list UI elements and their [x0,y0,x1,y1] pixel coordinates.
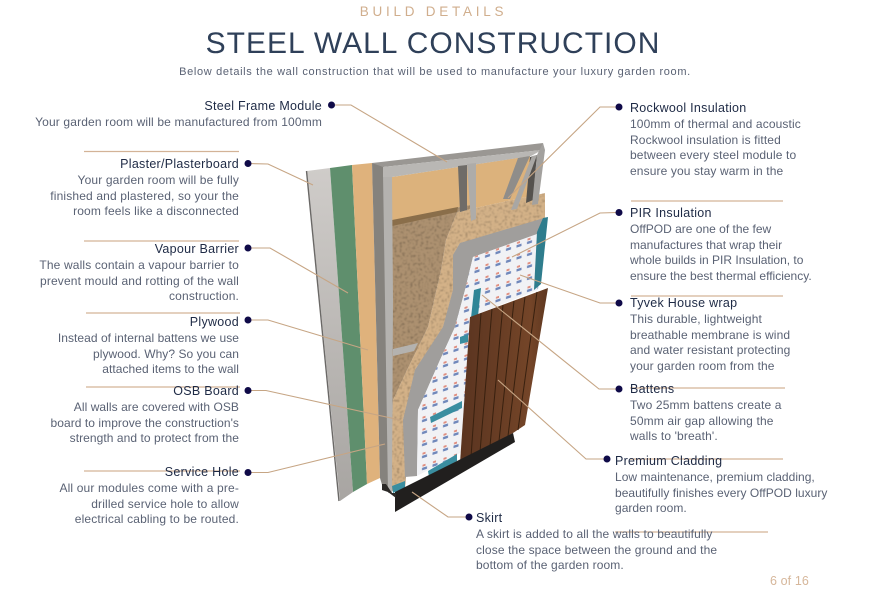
callout: Tyvek house wrap: your garden room from the [630,359,775,373]
callout: rockwool insulation: Rockwool Insulation [630,101,746,115]
callout: Tyvek house wrap: and water resistant protecting [630,343,790,357]
rockwool insulation [391,205,470,491]
eyebrow: build details: BUILD DETAILS [360,4,507,19]
callout: service hole: electrical cabling to be routed. [75,512,239,526]
batten: bottom stub [392,481,405,493]
page number: 6 of 16 [770,574,809,588]
callout: battens [630,382,782,443]
frame light flange [383,174,393,493]
callout: service hole: Service Hole [165,465,239,479]
callout: skirt: close the space between the ground and the [476,543,717,557]
callout: battens: Two 25mm battens create a [630,398,782,412]
OSB board [391,193,545,491]
callout: OSB board: board to improve the construction's [50,416,239,430]
header titles [179,4,691,78]
stud cross piece [393,343,418,356]
rear brace [503,156,530,199]
batten: middle horizontal [430,401,462,423]
right post [532,143,545,205]
callout: premium cladding: garden room. [615,501,687,515]
premium cladding [460,288,548,463]
callout: Tyvek house wrap: This durable, lightweight [630,312,762,326]
callout: vapour barrier [39,242,239,303]
callout: PIR insulation: whole builds in PIR Insulation, to [630,253,803,267]
callout: OSB board [50,384,239,445]
frame top rail [383,150,542,177]
callout: premium cladding [615,454,828,515]
callout: rockwool insulation: 100mm of thermal and acoustic [630,117,801,131]
callout: premium cladding: beautifully finishes every OffPOD luxury [615,486,827,500]
callout: battens: walls to 'breath'. [630,429,718,443]
callout: rockwool insulation: between every steel module to [630,148,796,162]
frame top surface [372,143,543,167]
callout: plywood: plywood. Why? So you can [93,347,239,361]
batten: right vertical [534,217,548,290]
plywood layer [352,163,380,484]
steel frame [372,143,545,494]
PIR insulation [403,218,545,477]
callout: skirt: Skirt [476,511,502,525]
callout: rockwool insulation [630,101,801,178]
callout: plywood: attached items to the wall [102,362,239,376]
callout: skirt [476,511,717,572]
batten: top stub [460,334,468,344]
callout: premium cladding: Premium Cladding [615,454,722,468]
callout: PIR insulation: PIR Insulation [630,206,712,220]
callout: vapour barrier: The walls contain a vapour barrier to [39,258,239,272]
callout: steel frame module: Your garden room will be manufactured from 100mm [35,115,322,129]
callout: plaster/plasterboard: room feels like a disconnected [73,204,239,218]
callout: PIR insulation: OffPOD are one of the few [630,222,771,236]
plaster layer [307,168,353,501]
callout: skirt: bottom of the garden room. [476,558,624,572]
callout: PIR insulation: ensure the best thermal efficiency. [630,269,812,283]
stud flange [467,163,476,221]
dark stud [458,165,467,212]
callout: plaster/plasterboard: Plaster/Plasterboard [120,157,239,171]
callout: OSB board: OSB Board [173,384,239,398]
callout: rockwool insulation: ensure you stay warm in the [630,164,783,178]
frame dark side [372,163,391,494]
callout: PIR insulation: manufactures that wrap their [630,238,782,252]
callout: rockwool insulation: Rockwool insulation is fitted [630,133,781,147]
skirt [382,433,515,512]
title: STEEL WALL CONSTRUCTION [206,27,660,60]
vapour barrier layer [330,165,367,492]
callout: PIR insulation [630,206,812,283]
callout: premium cladding: Low maintenance, premium cladding, [615,470,815,484]
callout: battens: 50mm air gap allowing the [630,414,774,428]
leader lines and dots [248,105,619,517]
callout: vapour barrier: Vapour Barrier [155,242,239,256]
timber back panel [392,156,530,225]
callout: service hole: drilled service hole to allow [91,497,239,511]
Tyvek house wrap [417,232,542,476]
callout: vapour barrier: prevent mould and rotting of the wall [40,274,239,288]
batten: lower horizontal [428,454,457,477]
subtitle: Below details the wall construction that will be used to manufacture your luxury garden room. [179,66,691,78]
callout: service hole [59,465,239,526]
callout: Tyvek house wrap: breathable membrane is wind [630,328,790,342]
callout: steel frame module [35,99,322,129]
callout: plywood: Instead of internal battens we use [58,331,239,345]
callout: Tyvek house wrap: Tyvek House wrap [630,296,737,310]
callout: steel frame module: Steel Frame Module [204,99,322,113]
callout: battens: Battens [630,382,674,396]
callout: plaster/plasterboard: Your garden room will be fully [78,173,239,187]
battens [392,217,548,493]
callout: plaster/plasterboard: finished and plastered, so your the [50,189,239,203]
callout: Tyvek house wrap [630,296,790,373]
callout: plywood: Plywood [190,315,239,329]
rule lines [84,152,785,532]
callout: OSB board: All walls are covered with OSB [74,400,239,414]
callout: OSB board: strength and to protect from the [70,431,239,445]
batten: upper [471,288,481,318]
rockwool top edge [392,207,458,226]
callout: plywood [58,315,239,376]
callout: plaster/plasterboard [50,157,239,218]
front brace [511,155,537,210]
callout: service hole: All our modules come with a pre- [59,481,239,495]
callout: skirt: A skirt is added to all the walls to beautifully [476,527,713,541]
callout: vapour barrier: construction. [169,289,239,303]
